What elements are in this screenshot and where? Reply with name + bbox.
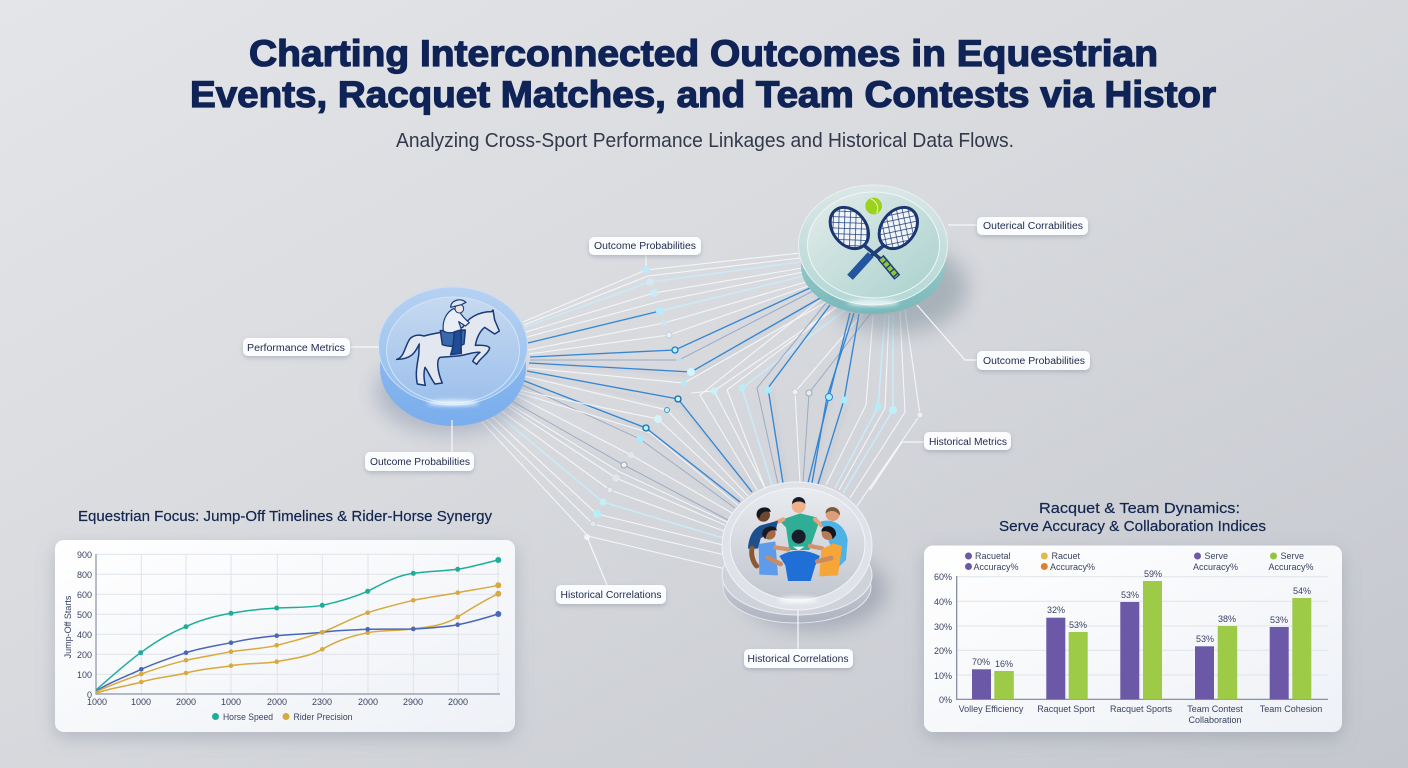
network connection lines bbox=[480, 253, 920, 570]
legend bbox=[212, 712, 352, 723]
y axis labels: 40% bbox=[934, 597, 952, 607]
title: Charting Interconnected Outcomes in Equestrian bbox=[249, 33, 1158, 74]
series: blue bbox=[96, 611, 501, 691]
callout: Outerical Corrabilities bbox=[948, 217, 1088, 235]
x axis labels: Collaboration bbox=[1188, 715, 1242, 725]
y axis labels: 30% bbox=[934, 622, 952, 632]
bar value labels: 70% bbox=[972, 657, 990, 667]
bar value labels: 16% bbox=[995, 659, 1013, 669]
legend: Rider Precision bbox=[294, 712, 352, 723]
x axis labels: 2300 bbox=[312, 697, 332, 707]
y axis labels: 800 bbox=[77, 570, 92, 580]
x axis labels bbox=[959, 704, 1322, 725]
x axis labels: 2000 bbox=[448, 697, 468, 707]
series: rider precision upper bbox=[96, 582, 501, 692]
x axis labels: 2000 bbox=[358, 697, 378, 707]
bars: green series bbox=[994, 581, 1311, 699]
panel: bar chart bbox=[924, 546, 1342, 732]
y axis labels: 60% bbox=[934, 572, 952, 582]
legend: Horse Speed bbox=[223, 712, 273, 723]
title: Events, Racquet Matches, and Team Contests via Histor bbox=[190, 74, 1216, 115]
bar value labels: 32% bbox=[1047, 605, 1065, 615]
y axis labels bbox=[934, 572, 952, 705]
legend: Serve bbox=[1204, 551, 1228, 561]
legend: Racuet bbox=[1052, 551, 1081, 561]
y axis title: Jump-Off Starts bbox=[63, 595, 73, 658]
network junction dots bbox=[584, 266, 923, 540]
bar value labels: 53% bbox=[1069, 620, 1087, 630]
subtitle: Analyzing Cross-Sport Performance Linkages and Historical Data Flows. bbox=[396, 130, 1014, 152]
x axis labels: Racquet Sport bbox=[1037, 704, 1095, 714]
title bbox=[190, 33, 1216, 115]
chart grid bbox=[957, 577, 1328, 675]
legend: Accuracy% bbox=[1268, 562, 1314, 572]
y axis labels: 900 bbox=[77, 550, 92, 560]
panel: line chart bbox=[55, 540, 515, 732]
bar value labels: 59% bbox=[1144, 569, 1162, 579]
x axis labels: 2000 bbox=[176, 697, 196, 707]
callout: Outcome Probabilities right bbox=[917, 305, 1090, 370]
callout: Outcome Probabilities right: Outcome Probabilities bbox=[983, 356, 1085, 367]
y axis labels: 0% bbox=[939, 695, 952, 705]
callout: Performance Metrics: Performance Metrics bbox=[247, 343, 345, 354]
heading: racquet and team dynamics: Serve Accuracy & Collaboration Indices bbox=[999, 518, 1266, 535]
x axis labels: 1000 bbox=[87, 697, 107, 707]
x axis labels: 1000 bbox=[221, 697, 241, 707]
node: team disc bbox=[722, 482, 887, 630]
callout: Historical Correlations left: Historical Correlations bbox=[560, 590, 662, 601]
series: rider precision lower bbox=[96, 591, 501, 693]
bar value labels: 53% bbox=[1196, 634, 1214, 644]
callout: Performance Metrics bbox=[243, 338, 379, 356]
callout: Historical Metrics: Historical Metrics bbox=[929, 437, 1007, 448]
callout: Historical Correlations bottom bbox=[744, 610, 853, 668]
series: horse speed bbox=[96, 557, 501, 690]
icon: horse and rider bbox=[397, 300, 499, 385]
bar value labels bbox=[972, 569, 1311, 669]
x axis labels: Team Contest bbox=[1187, 704, 1243, 714]
legend: Accuracy% bbox=[1050, 562, 1095, 572]
bar value labels: 53% bbox=[1270, 615, 1288, 625]
legend: Serve bbox=[1280, 551, 1304, 561]
x axis labels: Volley Efficiency bbox=[959, 704, 1024, 714]
x axis labels bbox=[87, 697, 468, 707]
heading: racquet and team dynamics bbox=[999, 500, 1266, 535]
node: equestrian disc bbox=[376, 287, 528, 434]
node: racquet disc bbox=[798, 185, 967, 333]
callout: Historical Correlations bottom: Historical Correlations bbox=[748, 654, 848, 665]
icon: crossed racquets and ball bbox=[822, 198, 925, 277]
bar value labels: 53% bbox=[1121, 590, 1139, 600]
y axis labels: 400 bbox=[77, 630, 92, 640]
x axis labels: Racquet Sports bbox=[1110, 704, 1173, 714]
x axis labels: 2900 bbox=[403, 697, 423, 707]
legend bbox=[965, 551, 1314, 572]
legend: Accuracy% bbox=[974, 562, 1019, 572]
y axis labels: 500 bbox=[77, 610, 92, 620]
callout: Historical Correlations left bbox=[556, 537, 666, 604]
callout: Outcome Probabilities top: Outcome Probabilities bbox=[594, 241, 696, 252]
x axis labels: 1000 bbox=[131, 697, 151, 707]
y axis labels: 200 bbox=[77, 650, 92, 660]
callout: Outerical Corrabilities: Outerical Corrabilities bbox=[983, 221, 1083, 232]
y axis labels: 20% bbox=[934, 646, 952, 656]
bar value labels: 54% bbox=[1293, 586, 1311, 596]
heading: equestrian focus: Equestrian Focus: Jump-Off Timelines & Rider-Horse Synergy bbox=[78, 508, 492, 525]
y axis labels: 100 bbox=[77, 670, 92, 680]
bar value labels: 38% bbox=[1218, 614, 1236, 624]
legend: Accuracy% bbox=[1193, 562, 1238, 572]
y axis labels: 600 bbox=[77, 590, 92, 600]
heading: racquet and team dynamics: Racquet & Team Dynamics: bbox=[1039, 500, 1240, 517]
chart grid bbox=[96, 554, 500, 694]
legend: Racuetal bbox=[975, 551, 1011, 561]
x axis labels: Team Cohesion bbox=[1260, 704, 1322, 714]
x axis labels: 2000 bbox=[267, 697, 287, 707]
y axis labels: 10% bbox=[934, 671, 952, 681]
callout: Historical Metrics bbox=[870, 432, 1011, 490]
callout: Outcome Probabilities left: Outcome Probabilities bbox=[370, 457, 470, 468]
bars: purple series bbox=[972, 602, 1289, 699]
callout: Outcome Probabilities left bbox=[365, 420, 474, 471]
icon: team huddle bbox=[748, 497, 848, 581]
y axis labels: 0 bbox=[87, 690, 92, 700]
y axis labels bbox=[77, 550, 92, 700]
callout: Outcome Probabilities top bbox=[589, 237, 701, 266]
